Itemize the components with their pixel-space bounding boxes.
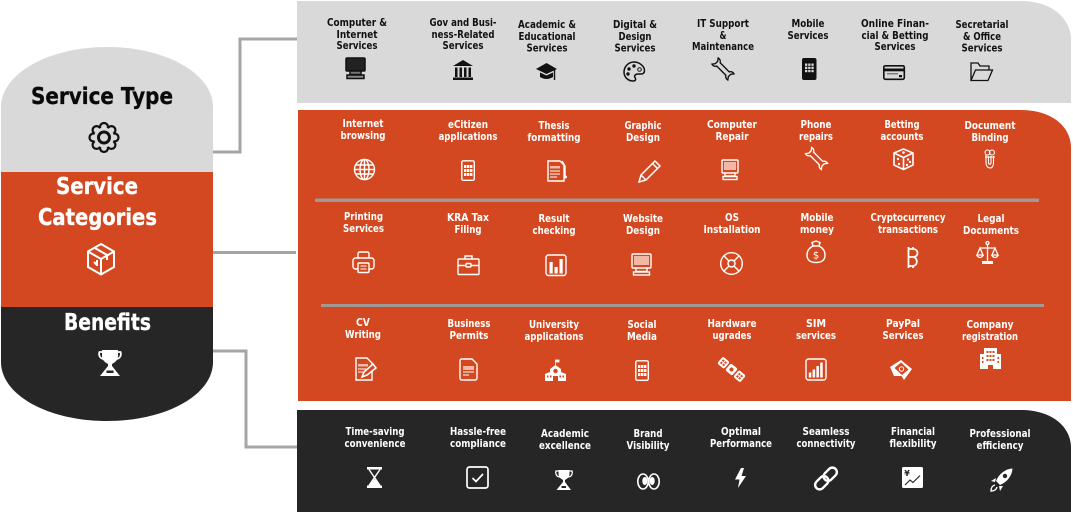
label: Thesis formatting: [528, 120, 580, 144]
label: Printing Services: Services: [343, 223, 384, 235]
label: Result checking: Result: [538, 213, 570, 225]
label: Academic & Educational Services: Academic &: [518, 19, 576, 31]
label: Digital & Design Services: Services: [614, 42, 656, 54]
icon: folder: [971, 63, 992, 80]
label: Internet browsing: browsing: [340, 130, 386, 142]
label: Legal Documents: [963, 213, 1019, 237]
heading: Benefits: Benefits: [64, 308, 151, 336]
label: Printing Services: [343, 211, 384, 235]
panel: service types: [297, 1, 1071, 103]
label: Document Binding: Document: [964, 120, 1016, 132]
icon: dice: [894, 149, 913, 170]
label: Optimal Performance: Performance: [710, 438, 772, 450]
icon: paper clip: [985, 150, 995, 168]
label: Hardware ugrades: [708, 318, 756, 342]
connector: benefits: [213, 351, 297, 447]
heading: Service Categories: [38, 172, 157, 231]
icon: checkbox: [467, 467, 488, 488]
label: University applications: applications: [524, 331, 584, 343]
icon: gear: [90, 123, 118, 152]
label: KRA Tax Filing: Filing: [454, 224, 482, 236]
label: IT Support & Maintenance: IT Support: [697, 18, 749, 30]
label: Cryptocurrency transactions: Cryptocurrency: [870, 212, 946, 224]
icon: payment tag: [890, 360, 912, 380]
label: Phone repairs: [799, 119, 833, 143]
label: Academic excellence: [539, 428, 591, 452]
label: Online Financial & Betting Services: [861, 18, 929, 53]
label: Betting accounts: Betting: [884, 119, 920, 131]
label: Thesis formatting: Thesis: [538, 120, 570, 132]
icon: lightning bolt: [735, 468, 746, 488]
label: Professional efficiency: [970, 428, 1030, 452]
label: Brand Visibility: [626, 428, 670, 452]
label: Computer & Internet Services: Internet: [336, 29, 378, 41]
label: Online Financial & Betting Services: cial & Betting: [862, 30, 928, 42]
label: Legal Documents: Legal: [978, 213, 1004, 225]
icon: yen chart: [902, 467, 923, 488]
label: OS Installation: OS: [725, 212, 739, 224]
label: eCitizen applications: applications: [438, 131, 498, 143]
icon: office building: [980, 348, 1001, 369]
label: Financial flexibility: flexibility: [890, 438, 937, 450]
icon: mobile phone: [802, 58, 816, 80]
label: Computer & Internet Services: Computer &: [327, 17, 387, 29]
icon: phone app: [636, 361, 648, 380]
icon: credit card: [884, 66, 904, 79]
label: University applications: University: [529, 319, 579, 331]
label: KRA Tax Filing: [447, 212, 489, 236]
icon: bitcoin: [908, 247, 918, 268]
icon: computer: [346, 58, 365, 78]
label: Time-saving convenience: [344, 426, 406, 450]
label: Cryptocurrency transactions: transactions: [878, 224, 938, 236]
label: Company registration: registration: [962, 331, 1018, 343]
column: service type segment: [1, 47, 213, 172]
label: IT Support & Maintenance: Maintenance: [692, 41, 754, 53]
label: Internet browsing: Internet: [342, 118, 384, 130]
column: benefits segment: [1, 307, 213, 421]
label: Academic & Educational Services: Services: [526, 42, 568, 54]
label: PayPal Services: Services: [882, 330, 924, 342]
label: SIM services: SIM: [806, 318, 826, 330]
label: Hardware ugrades: ugrades: [712, 330, 752, 342]
label: Online Financial & Betting Services: Services: [874, 41, 916, 53]
label: PayPal Services: [882, 318, 924, 342]
icon: eyes: [638, 474, 659, 489]
label: Mobile money: Mobile: [800, 212, 834, 224]
label: IT Support & Maintenance: [692, 18, 754, 53]
label: Document Binding: Binding: [972, 132, 1008, 144]
label: Gov and Business-Related Services: [430, 17, 496, 52]
label: IT Support & Maintenance: &: [720, 30, 726, 42]
label: Gov and Business-Related Services: Services: [442, 40, 484, 52]
label: Computer Repair: Computer: [707, 119, 758, 131]
label: Secretarial & Office Services: Services: [962, 42, 1002, 54]
label: Hardware ugrades: Hardware: [708, 318, 756, 330]
heading: Service Categories: Categories: [38, 203, 157, 231]
label: Mobile Services: Services: [788, 30, 828, 42]
label: Social Media: [627, 319, 657, 343]
label: Gov and Business-Related Services: Gov and Busi-: [430, 17, 496, 29]
label: Website Design: Website: [623, 213, 663, 225]
icon: document: [548, 161, 567, 181]
label: Secretarial & Office Services: Secretarial: [956, 19, 1008, 31]
icon: school: [545, 360, 566, 381]
label: Graphic Design: Design: [626, 132, 660, 144]
icon: document: [460, 359, 477, 380]
label: Academic excellence: Academic: [541, 428, 589, 440]
icon: computer: [632, 254, 651, 275]
label: Website Design: Design: [626, 225, 660, 237]
label: Mobile money: money: [800, 224, 834, 236]
label: Betting accounts: accounts: [880, 131, 924, 143]
label: Betting accounts: [880, 119, 924, 143]
label: CV Writing: [345, 317, 381, 341]
icon: bank: [453, 60, 473, 80]
label: Digital & Design Services: Digital &: [613, 19, 657, 31]
label: SIM services: services: [796, 330, 836, 342]
icon: document with pencil: [356, 358, 376, 380]
icon: globe: [354, 160, 374, 180]
label: Seamless connectivity: Seamless: [802, 426, 850, 438]
icon: graduation cap: [536, 63, 557, 80]
label: CV Writing: Writing: [345, 329, 381, 341]
heading: Service Categories: Service: [56, 172, 138, 200]
icon: rocket: [991, 468, 1012, 491]
icon: hourglass: [367, 467, 382, 488]
icon: box: [88, 244, 114, 274]
label: Brand Visibility: Visibility: [626, 440, 670, 452]
label: Professional efficiency: efficiency: [976, 440, 1024, 452]
icon: pencil: [639, 161, 660, 182]
label: Seamless connectivity: connectivity: [796, 438, 856, 450]
icon: signal bars: [806, 359, 826, 380]
label: SIM services: [796, 318, 836, 342]
label: Time-saving convenience: convenience: [344, 438, 406, 450]
label: Thesis formatting: formatting: [528, 132, 580, 144]
label: Mobile money: [800, 212, 834, 236]
label: Academic excellence: excellence: [539, 440, 591, 452]
label: Brand Visibility: Brand: [634, 428, 662, 440]
label: Gov and Business-Related Services: ness-Related: [432, 29, 494, 41]
label: Digital & Design Services: [613, 19, 657, 54]
icon: briefcase: [458, 256, 479, 274]
label: Phone repairs: Phone: [800, 119, 832, 131]
icon: satellite: [717, 356, 746, 383]
connector: service type: [213, 39, 297, 152]
label: eCitizen applications: [438, 119, 498, 143]
label: Graphic Design: Graphic: [624, 120, 662, 132]
label: Computer Repair: Repair: [716, 131, 749, 143]
label: Computer & Internet Services: [327, 17, 387, 52]
label: Secretarial & Office Services: & Office: [963, 31, 1001, 43]
label: Professional efficiency: Professional: [970, 428, 1030, 440]
icon: palette: [624, 62, 644, 81]
label: Social Media: Media: [627, 331, 657, 343]
label: Website Design: [623, 213, 663, 237]
label: OS Installation: Installation: [704, 224, 760, 236]
label: Phone repairs: repairs: [799, 131, 833, 143]
icon: trophy: [99, 350, 121, 376]
label: Seamless connectivity: [796, 426, 856, 450]
label: Academic & Educational Services: [518, 19, 576, 54]
label: Academic & Educational Services: Educational: [518, 31, 576, 43]
icon: money bag: [807, 241, 825, 262]
label: Hassle-free compliance: Hassle-free: [450, 426, 506, 438]
label: Optimal Performance: Optimal: [721, 426, 761, 438]
panel: service categories: [298, 110, 1071, 401]
icon: scales: [976, 242, 998, 264]
label: PayPal Services: PayPal: [886, 318, 920, 330]
label: University applications: [524, 319, 584, 343]
label: Document Binding: [964, 120, 1016, 144]
label: Optimal Performance: [710, 426, 772, 450]
icon: money bag: $: [813, 250, 819, 262]
label: Digital & Design Services: Design: [618, 31, 652, 43]
label: eCitizen applications: eCitizen: [448, 119, 488, 131]
label: Company registration: Company: [966, 319, 1014, 331]
label: Business Permits: Business: [448, 318, 490, 330]
label: Cryptocurrency transactions: [870, 212, 946, 236]
icon: yen chart: ¥: [904, 469, 910, 478]
label: Graphic Design: [624, 120, 662, 144]
heading: Service Type: Service Type: [31, 82, 173, 110]
icon: phone app: [462, 161, 474, 180]
connector: service categories: [213, 251, 296, 254]
label: Internet browsing: [340, 118, 386, 142]
label: Business Permits: [448, 318, 490, 342]
label: KRA Tax Filing: KRA Tax: [447, 212, 489, 224]
label: Hassle-free compliance: [450, 426, 506, 450]
label: Social Media: Social: [628, 319, 656, 331]
label: Result checking: [532, 213, 576, 237]
label: Mobile Services: [788, 18, 828, 42]
column: service categories segment: [1, 172, 213, 307]
label: Business Permits: Permits: [450, 330, 488, 342]
icon: disc: [721, 253, 742, 274]
label: Time-saving convenience: Time-saving: [346, 426, 404, 438]
label: Financial flexibility: [890, 426, 937, 450]
label: Secretarial & Office Services: [956, 19, 1008, 54]
label: OS Installation: [704, 212, 760, 236]
label: Company registration: [962, 319, 1018, 343]
icon: computer: [722, 160, 738, 180]
label: CV Writing: CV: [356, 317, 371, 329]
label: Computer & Internet Services: Services: [336, 40, 378, 52]
label: Financial flexibility: Financial: [891, 426, 935, 438]
label: Mobile Services: Mobile: [792, 18, 824, 30]
label: Hassle-free compliance: compliance: [450, 438, 506, 450]
label: Legal Documents: Documents: [963, 225, 1019, 237]
icon: wrench: [805, 147, 828, 170]
label: Computer Repair: [707, 119, 758, 143]
icon: bar chart: [546, 255, 566, 276]
label: Result checking: checking: [532, 225, 576, 237]
panel: benefits: [297, 410, 1071, 512]
icon: wrench: [712, 58, 734, 80]
icon: printer: [353, 252, 374, 272]
icon: chain link: [813, 466, 839, 491]
label: Printing Services: Printing: [344, 211, 383, 223]
icon: trophy: [556, 470, 572, 490]
label: Online Financial & Betting Services: Online Finan-: [861, 18, 929, 30]
